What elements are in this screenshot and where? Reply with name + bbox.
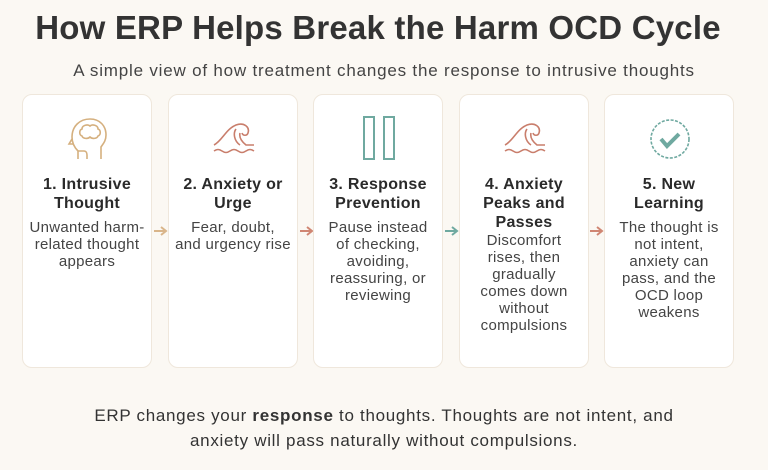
- heading: step 2: Urge: [214, 195, 252, 212]
- heading: step 2: and urgency rise: [175, 236, 291, 253]
- heading: step 5: pass, and the: [622, 270, 716, 287]
- heading: step 1: 1. Intrusive: [43, 176, 131, 193]
- heading: step 2: Fear, doubt,: [191, 219, 275, 236]
- heading: step 5: weakens: [638, 304, 700, 321]
- panel: step 3: [313, 94, 443, 368]
- heading: step 3: [329, 176, 427, 304]
- heading: step 3: reassuring, or: [330, 270, 426, 287]
- heading: step 3: of checking,: [336, 236, 420, 253]
- heading: step 4: Passes: [496, 214, 552, 231]
- footer text: anxiety will pass naturally without compulsions.: [190, 431, 578, 450]
- heading: step 5: not intent,: [634, 236, 704, 253]
- heading: step 4: Peaks and: [483, 195, 565, 212]
- heading: step 4: compulsions: [481, 317, 567, 334]
- panel: step 4: [459, 94, 589, 368]
- heading: step 5: anxiety can: [629, 253, 709, 270]
- heading: step 3: 3. Response: [329, 176, 427, 193]
- arrow 2: [300, 226, 313, 236]
- heading: step 5: [619, 176, 719, 321]
- heading: step 2: 2. Anxiety or: [183, 176, 283, 193]
- heading: step 4: without: [499, 300, 549, 317]
- panel: step 5: [604, 94, 734, 368]
- heading: step 5: The thought is: [619, 219, 719, 236]
- panel: step 2: [168, 94, 298, 368]
- heading: step 3: Pause instead: [329, 219, 427, 236]
- heading: step 4: 4. Anxiety: [485, 176, 563, 193]
- arrow 3: [445, 226, 458, 236]
- footer text: ERP changes your response to thoughts. Thoughts are not intent, and: [94, 406, 674, 425]
- icon: wave: [504, 123, 546, 154]
- heading: step 1: appears: [59, 253, 115, 270]
- arrow 1: [154, 226, 168, 236]
- arrow 4: [590, 226, 604, 236]
- heading: step 4: rises, then: [488, 249, 560, 266]
- heading: step 3: Prevention: [335, 195, 421, 212]
- icon: pause: [363, 116, 395, 160]
- heading: step 2: [175, 176, 291, 253]
- title: How ERP Helps Break the Harm OCD Cycle: [35, 9, 721, 46]
- heading: step 1: [29, 176, 145, 270]
- heading: step 5: Learning: [634, 195, 704, 212]
- panel: step 1: [22, 94, 152, 368]
- heading: step 5: OCD loop: [635, 287, 703, 304]
- icon: check badge: [650, 119, 690, 159]
- icon: wave: [214, 123, 254, 154]
- heading: step 4: [480, 176, 568, 334]
- heading: step 5: 5. New: [643, 176, 695, 193]
- subtitle: A simple view of how treatment changes the response to intrusive thoughts: [73, 61, 695, 80]
- heading: step 3: avoiding,: [347, 253, 409, 270]
- heading: step 4: Discomfort: [487, 232, 561, 249]
- heading: step 1: Thought: [54, 195, 120, 212]
- footer text: [94, 406, 674, 450]
- heading: step 3: reviewing: [345, 287, 411, 304]
- icon: head with brain: [68, 118, 107, 159]
- heading: step 1: Unwanted harm-: [29, 219, 145, 236]
- heading: step 4: gradually: [492, 266, 556, 283]
- heading: step 4: comes down: [480, 283, 568, 300]
- heading: step 1: related thought: [35, 236, 139, 253]
